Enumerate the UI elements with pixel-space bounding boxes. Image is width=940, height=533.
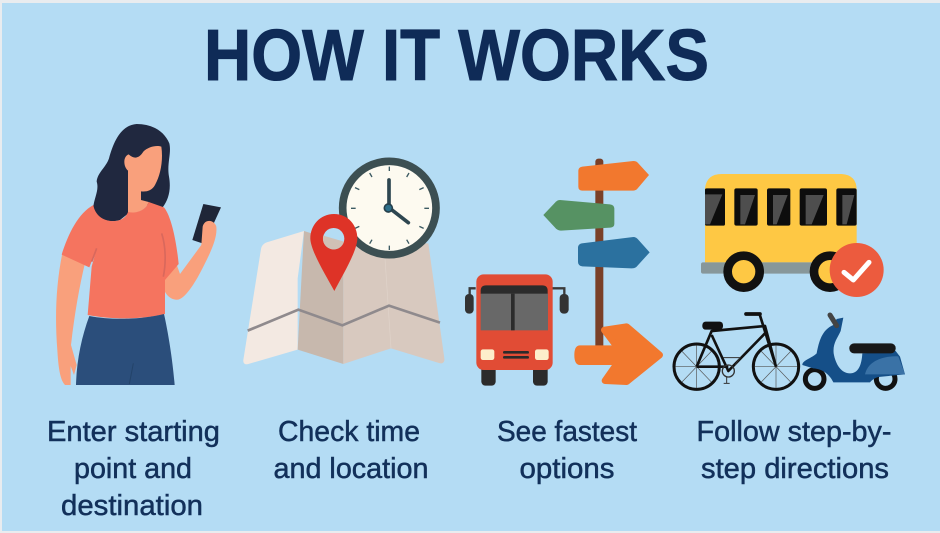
step 4 label: Follow step-by- xyxy=(696,416,892,448)
bicycle xyxy=(674,313,799,389)
step 3 label: options xyxy=(520,453,614,485)
step 4 label: step directions xyxy=(701,453,889,485)
title: HOW IT WORKS xyxy=(204,16,709,96)
map xyxy=(243,231,444,364)
icon: map with pin and clock xyxy=(243,161,444,364)
step 1 label: Enter starting xyxy=(47,416,220,448)
icon: woman with phone xyxy=(56,124,221,385)
clock xyxy=(343,161,436,255)
step 2 label xyxy=(274,416,428,485)
icon: yellow bus with check, bicycle and scooter xyxy=(674,174,905,389)
step 1 label: destination xyxy=(61,490,203,522)
check badge xyxy=(830,243,884,297)
step 1 label: point and xyxy=(74,453,192,485)
step 1 label xyxy=(47,416,220,522)
map pin xyxy=(310,214,357,291)
orange arrow xyxy=(578,327,660,382)
step 2 label: Check time xyxy=(278,416,420,448)
signpost xyxy=(543,159,650,349)
yellow bus xyxy=(701,174,857,288)
icon: signpost, bus and arrow xyxy=(465,159,660,386)
step 3 label xyxy=(497,416,637,485)
step 4 label xyxy=(696,416,892,485)
scooter xyxy=(802,315,905,388)
red bus xyxy=(465,274,569,386)
step 2 label: and location xyxy=(274,453,428,485)
step 3 label: See fastest xyxy=(497,416,637,448)
